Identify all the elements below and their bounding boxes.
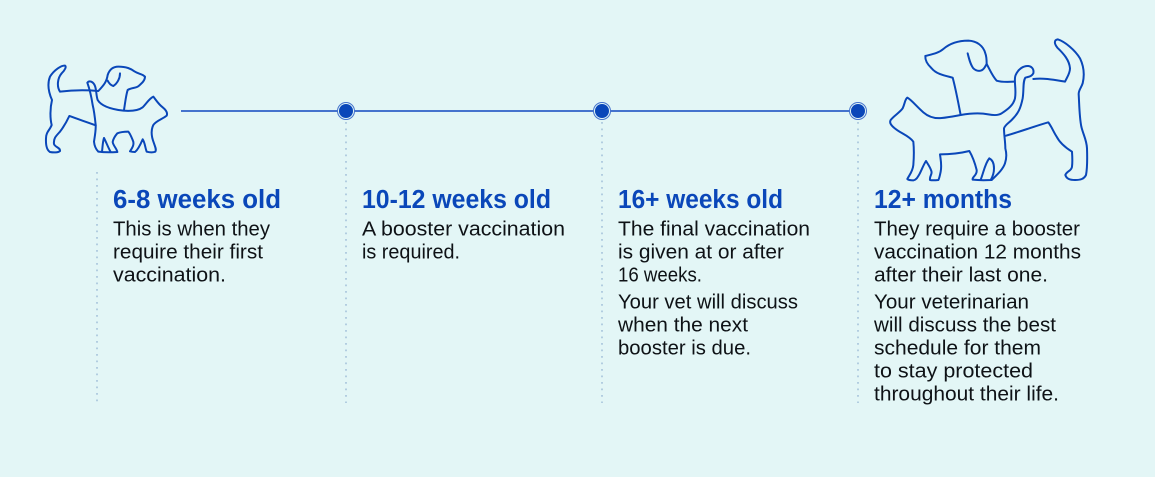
icon: small puppy and kitten	[46, 66, 167, 152]
text: annual booster: Your veterinarian	[874, 292, 1029, 314]
timeline marker: 10-12 weeks	[338, 102, 354, 120]
text: annual booster: schedule for them	[874, 338, 1041, 360]
text: first vaccination: This is when they	[113, 218, 270, 240]
text: first vaccination: require their first	[113, 242, 263, 264]
text: first vaccination: vaccination.	[113, 264, 226, 286]
timeline line	[181, 110, 850, 112]
text: final vaccination: 16 weeks.	[618, 264, 702, 286]
text: first vaccination	[113, 218, 270, 286]
heading: 10-12 weeks old: 10-12 weeks old	[362, 186, 551, 214]
text: annual booster: throughout their life.	[874, 384, 1059, 406]
text: booster required: is required.	[362, 242, 460, 264]
icon: large dog and cat	[890, 39, 1087, 180]
text: final vaccination: when the next	[617, 314, 748, 336]
text: annual booster: to stay protected	[874, 360, 1033, 382]
text: annual booster: after their last one.	[874, 264, 1048, 286]
step: 12+ months	[873, 186, 1081, 406]
text: booster required: A booster vaccination	[362, 218, 565, 240]
step: 6-8 weeks old	[113, 186, 281, 286]
heading: 16+ weeks old: 16+ weeks old	[618, 186, 783, 214]
text: final vaccination: is given at or after	[618, 242, 784, 264]
step: 10-12 weeks old	[362, 186, 565, 264]
text: final vaccination	[617, 218, 810, 360]
text: annual booster	[873, 218, 1081, 406]
text: final vaccination: The final vaccination	[618, 218, 810, 240]
text: annual booster: They require a booster	[874, 218, 1080, 240]
text: final vaccination: booster is due.	[618, 338, 751, 360]
timeline marker: 12+ months	[850, 102, 866, 120]
text: final vaccination: Your vet will discuss	[618, 292, 798, 314]
text: annual booster: vaccination 12 months	[874, 242, 1081, 264]
heading: 6-8 weeks old: 6-8 weeks old	[113, 186, 281, 214]
step: 16+ weeks old	[617, 186, 810, 360]
timeline marker: 16+ weeks	[594, 102, 610, 120]
text: booster required	[362, 218, 565, 264]
text: annual booster: will discuss the best	[873, 314, 1056, 336]
heading: 12+ months: 12+ months	[874, 186, 1012, 214]
